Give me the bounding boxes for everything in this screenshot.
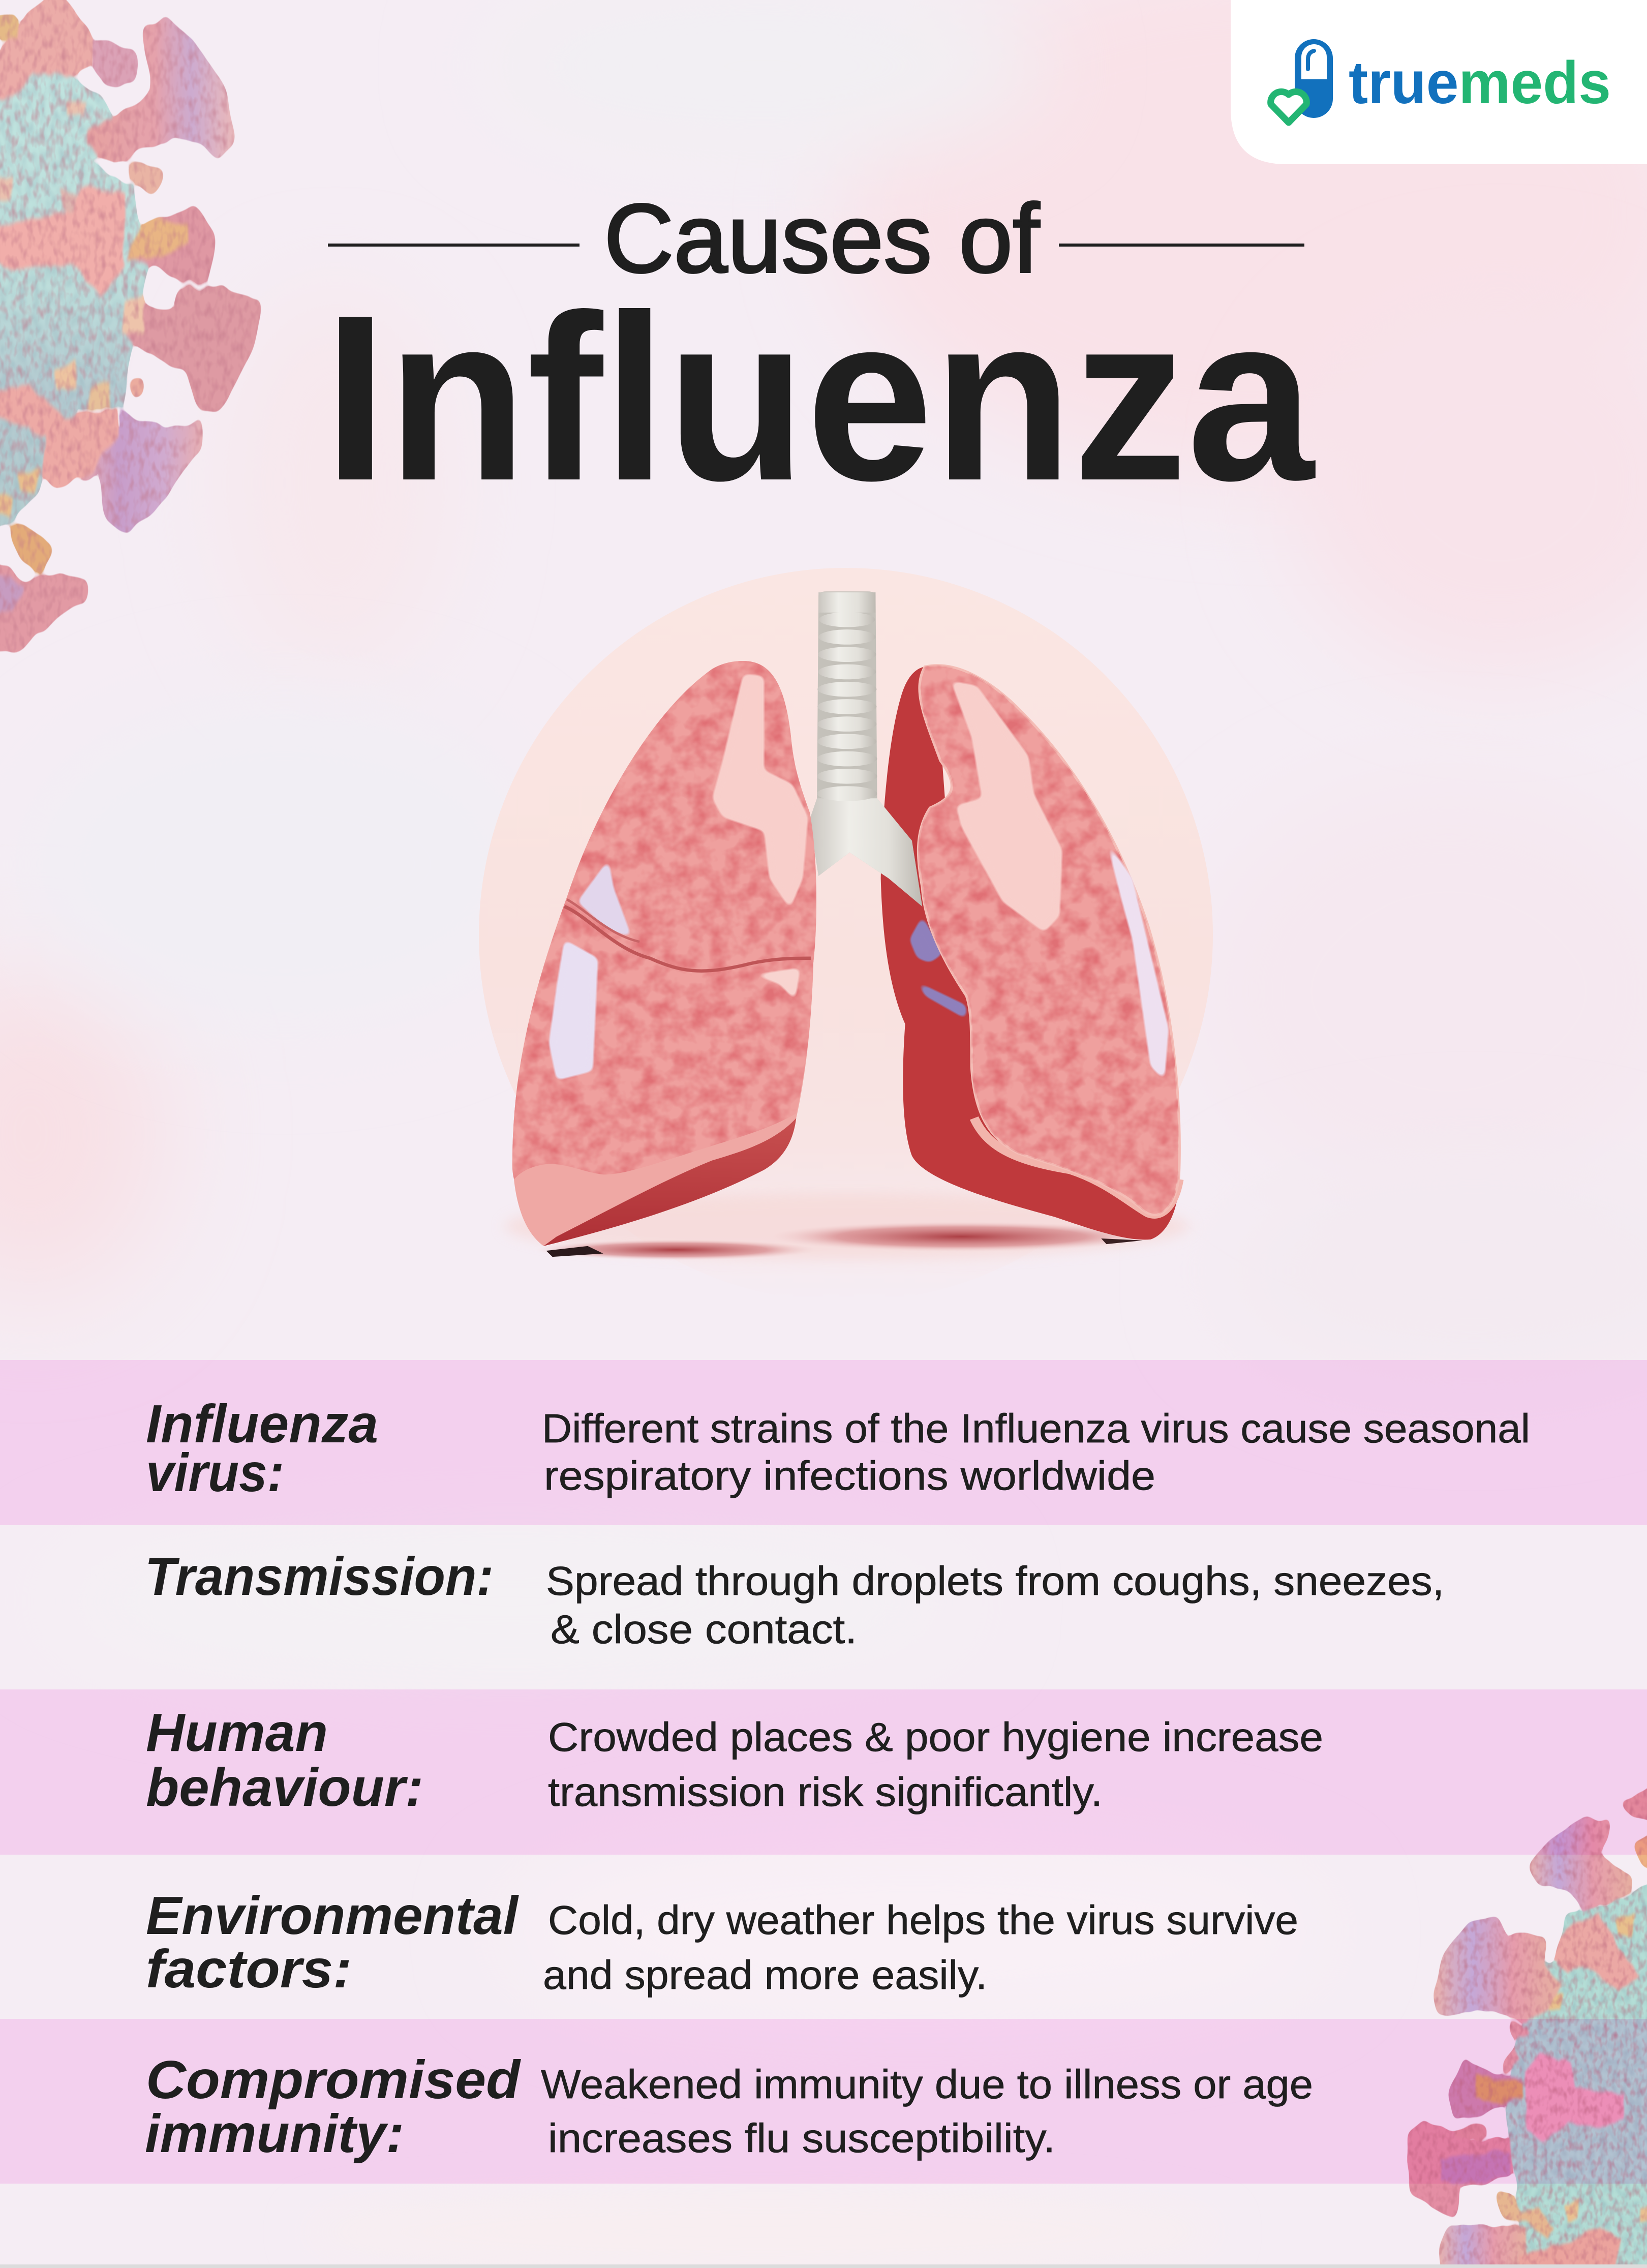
label: Influenza (146, 1394, 378, 1454)
trachea (810, 591, 922, 906)
description line 2: increases flu susceptibility. (548, 2115, 1055, 2161)
left lung, front (512, 661, 816, 1180)
ground shadow (505, 1193, 1190, 1260)
illustration: lungs (505, 591, 1190, 1260)
description: Different strains of the Influenza virus cause seasonal (542, 1406, 1530, 1451)
panel: logo (1231, 0, 1647, 164)
label: Environmental (146, 1886, 520, 1946)
title: Influenza: Influenza (324, 265, 1316, 530)
label: Transmission: (145, 1547, 494, 1607)
description line 2: respiratory infections worldwide (544, 1453, 1155, 1498)
description line 2: and spread more easily. (543, 1952, 987, 1998)
description line 2: transmission risk significantly. (548, 1769, 1103, 1815)
left lung, underside (543, 1118, 796, 1246)
description: Cold, dry weather helps the virus survive (548, 1897, 1298, 1943)
description line 2: & close contact. (551, 1607, 857, 1652)
row: Human behaviour (146, 1703, 1323, 1818)
description: Spread through droplets from coughs, sneezes, (546, 1558, 1444, 1604)
row: Compromised immunity (145, 2050, 1313, 2164)
label line 2: behaviour: (146, 1758, 423, 1818)
row: Environmental factors (146, 1886, 1298, 1999)
label line 2: immunity: (145, 2104, 404, 2164)
row: Influenza virus (146, 1394, 1530, 1503)
circle behind lungs (479, 568, 1213, 1302)
right lung, front (918, 666, 1179, 1215)
title: Causes of: Causes of (604, 184, 1040, 293)
description: Weakened immunity due to illness or age (541, 2062, 1313, 2107)
label: Compromised (146, 2050, 521, 2110)
panel: cause bands (0, 1360, 1647, 2184)
row: Transmission (145, 1547, 1444, 1652)
blue vessels (909, 916, 966, 1019)
label: Human (146, 1703, 328, 1763)
icon: capsule and heart (1271, 39, 1333, 123)
left lung, silhouette (512, 661, 816, 1246)
icon: virus, top left (0, 0, 261, 655)
description: Crowded places & poor hygiene increase (548, 1714, 1323, 1760)
right lung, back (881, 667, 1179, 1239)
label line 2: virus: (146, 1443, 284, 1503)
logo wordmark: truemeds (1349, 49, 1611, 116)
title: Causes of (328, 184, 1304, 293)
label line 2: factors: (146, 1939, 352, 1999)
icon: virus, bottom right (1408, 1782, 1647, 2268)
